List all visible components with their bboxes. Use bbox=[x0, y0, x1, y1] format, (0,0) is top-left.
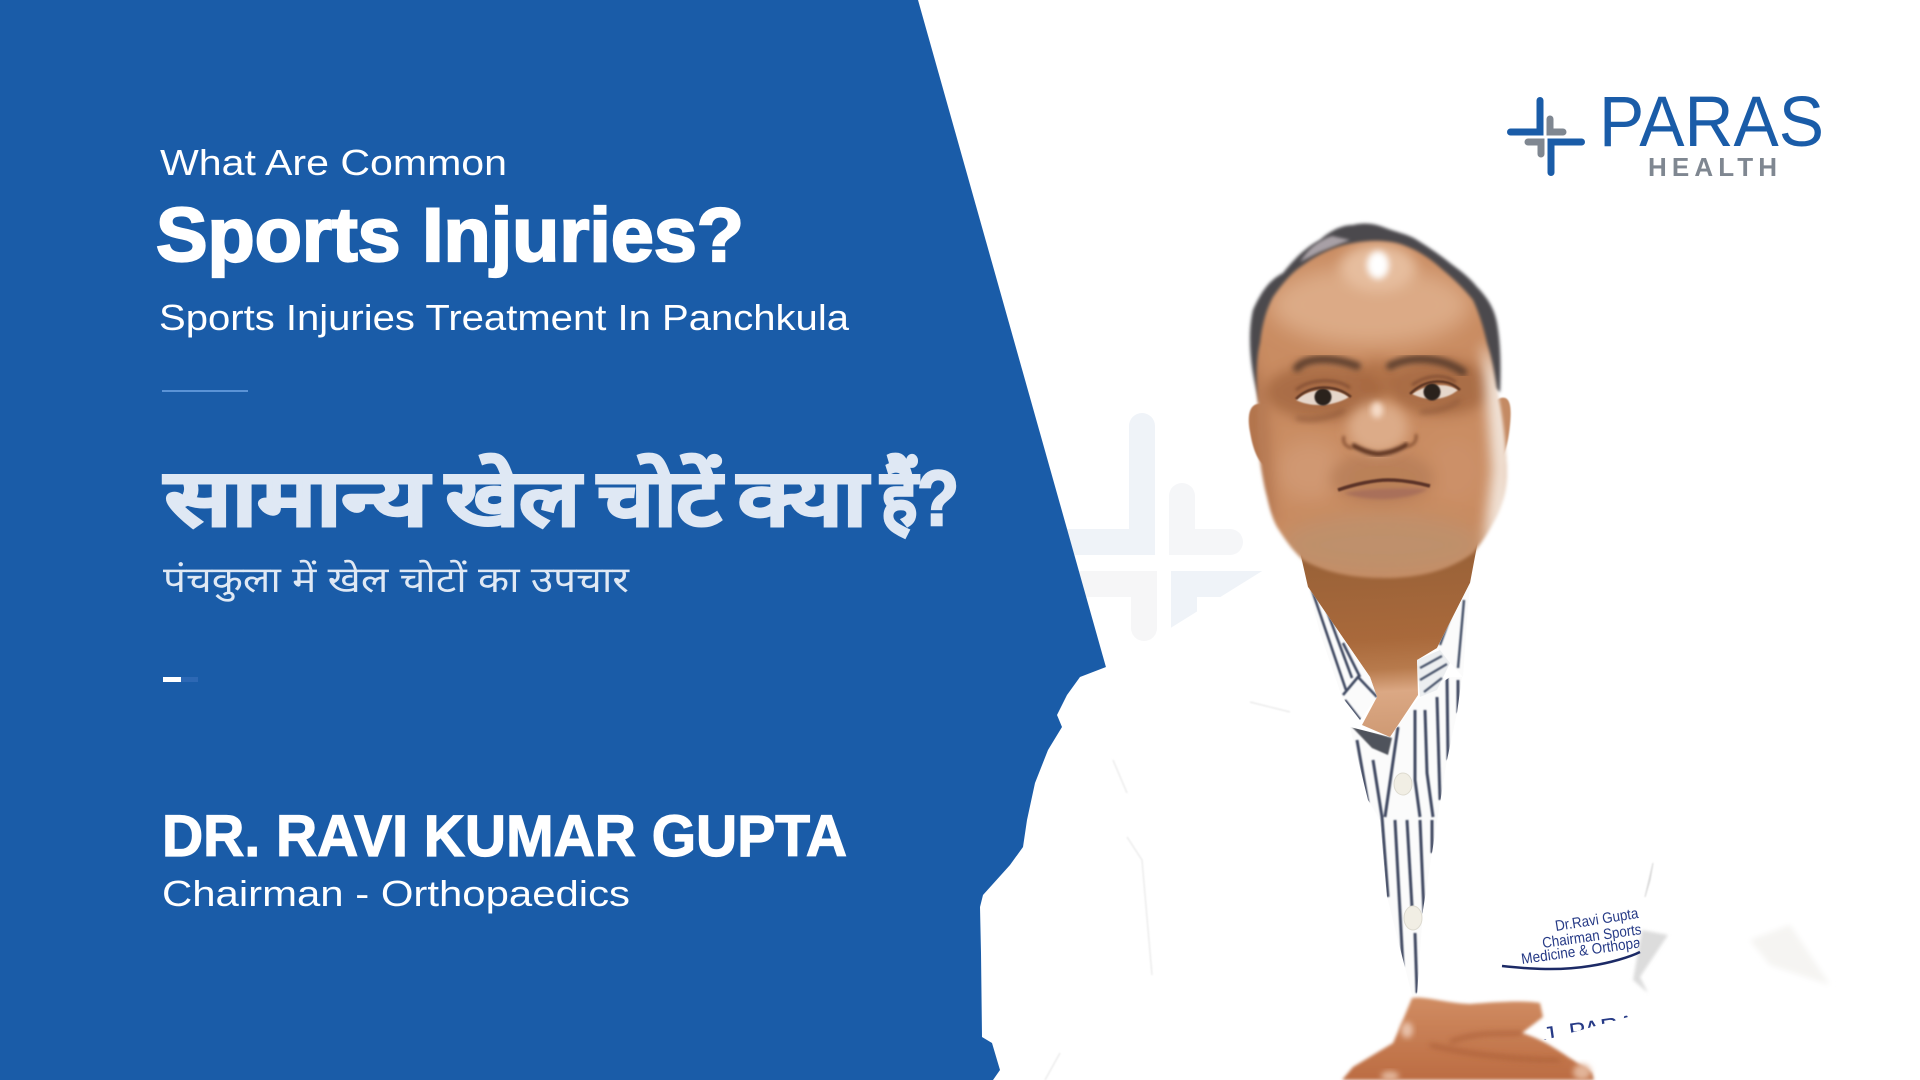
heading: hindi title: क्या bbox=[736, 454, 870, 542]
subheading: hindi treatment: पंचकुला में खेल चोटों का उपचार bbox=[163, 559, 630, 602]
subheading: treatment in Panchkula: Sports Injuries Treatment In Panchkula bbox=[159, 297, 850, 338]
face bbox=[1254, 238, 1509, 580]
doctor portrait bbox=[980, 224, 1850, 1080]
heading: hindi title: चोटें bbox=[596, 453, 724, 542]
shirt collar right bbox=[1417, 583, 1470, 697]
heading: what are common: What Are Common bbox=[160, 142, 507, 183]
shirt collar left bbox=[1308, 587, 1377, 722]
eyebrows bbox=[1297, 359, 1463, 372]
ears bbox=[1249, 398, 1511, 466]
coat badge bbox=[1502, 863, 1673, 1050]
background panel: blue diagonal bbox=[0, 0, 1120, 1080]
eyes bbox=[1296, 376, 1460, 419]
coat badge: Medicine & Orthopaedics bbox=[1520, 930, 1673, 968]
coat badge: Chairman Sports bbox=[1541, 921, 1643, 952]
logo tagline: HEALTH bbox=[1648, 152, 1777, 182]
watermark: faint logo cross bbox=[1040, 426, 1300, 660]
doctor role: Chairman - Orthopaedics bbox=[162, 873, 630, 914]
coat badge: J. PARAS bbox=[1541, 1008, 1654, 1050]
heading: hindi title: हैं? bbox=[879, 453, 959, 542]
logo wordmark: PARAS bbox=[1599, 83, 1824, 162]
hair bbox=[1250, 224, 1501, 403]
shirt body bbox=[1350, 677, 1462, 995]
lab coat bbox=[980, 553, 1850, 1080]
heading: hindi title: सामान्य bbox=[162, 454, 431, 542]
doctor name: DR. RAVI KUMAR GUPTA bbox=[162, 804, 847, 869]
pocket fold bbox=[1633, 930, 1668, 993]
clasped hands bbox=[1342, 998, 1594, 1080]
heading: hindi title: खेल bbox=[444, 453, 584, 542]
nose bbox=[1343, 402, 1416, 454]
accent dash bbox=[163, 677, 198, 682]
icon: logo cross bbox=[1510, 100, 1582, 172]
divider line bbox=[162, 390, 248, 392]
neck bbox=[1295, 530, 1480, 737]
hair tuft lighter bbox=[1300, 236, 1350, 262]
coat badge: Dr.Ravi Gupta bbox=[1554, 905, 1640, 935]
logo: Paras Health bbox=[1510, 83, 1824, 182]
heading: sports injuries: Sports Injuries? bbox=[156, 193, 744, 278]
shirt buttons bbox=[1394, 773, 1422, 930]
mouth bbox=[1338, 480, 1430, 499]
heading: hindi title bbox=[162, 453, 959, 542]
